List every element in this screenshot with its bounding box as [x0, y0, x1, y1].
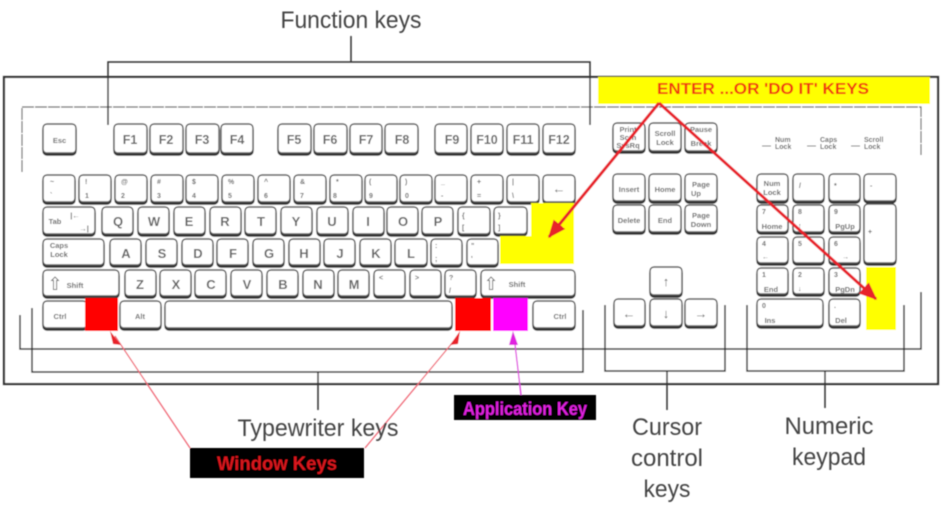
bottom row: Ctrl	[54, 312, 66, 321]
navigation keys: Pause	[690, 125, 712, 134]
cursor arrow keys	[614, 267, 717, 326]
lock indicator lights: Num	[775, 137, 791, 144]
function key row: F3	[195, 133, 209, 147]
number row: *	[336, 179, 339, 186]
number row: (	[369, 179, 372, 186]
ZXCV row: Shift	[509, 280, 526, 289]
lock indicator lights: Lock	[864, 144, 880, 151]
navigation keys: Delete	[618, 216, 640, 225]
numeric keypad keys: End	[764, 285, 778, 294]
QWERTY row: Tab	[49, 217, 62, 226]
QWERTY row: [	[462, 225, 465, 232]
QWERTY row: R	[220, 214, 230, 229]
ASDF row	[43, 239, 498, 265]
QWERTY row: I	[366, 214, 370, 229]
banner: enter or do it keys: ENTER ...OR 'DO IT' KEYS	[657, 81, 869, 98]
ASDF row: L	[407, 246, 415, 261]
QWERTY row: P	[434, 214, 443, 229]
lock indicator lights	[762, 137, 884, 151]
ASDF row: ;	[435, 256, 437, 263]
function key row: F4	[230, 133, 244, 147]
number row: -	[441, 193, 444, 200]
function key row: F2	[159, 133, 173, 147]
ZXCV row: B	[278, 277, 288, 292]
numeric keypad keys: .	[834, 303, 836, 310]
number row: =	[477, 193, 481, 200]
function key row: Esc	[53, 136, 66, 145]
number row: +	[477, 179, 481, 186]
navigation keys: Break	[691, 139, 712, 148]
arrows: banner to enter keys	[549, 103, 876, 299]
numeric keypad keys: 8	[798, 209, 802, 216]
bracket: function keys	[108, 36, 590, 125]
cursor arrow keys: ↑	[663, 274, 669, 289]
ZXCV row: /	[449, 288, 451, 295]
navigation keys: Lock	[656, 138, 675, 147]
QWERTY row: Q	[113, 214, 123, 229]
function key row: F5	[287, 133, 301, 147]
label: application key: Application Key	[463, 399, 587, 419]
numeric keypad keys: PgUp	[835, 222, 855, 231]
highlight: keypad enter key	[866, 267, 896, 330]
ASDF row: K	[371, 246, 381, 261]
function key row: F7	[359, 133, 373, 147]
QWERTY row: U	[327, 214, 337, 229]
numeric keypad keys: 3	[834, 272, 838, 279]
label: typewriter keys: Typewriter keys	[238, 415, 398, 442]
ASDF row: :	[435, 243, 437, 250]
number row: #	[157, 179, 161, 186]
highlight: application key	[493, 298, 528, 331]
label: cursor control keys: keys	[644, 476, 690, 503]
ASDF row: A	[121, 246, 131, 261]
ASDF row: F	[229, 246, 237, 261]
number row: 9	[369, 193, 373, 200]
numeric keypad keys: 1	[762, 272, 766, 279]
numeric keypad keys: *	[834, 183, 837, 190]
bracket: typewriter keys	[20, 292, 921, 410]
QWERTY row: O	[398, 214, 408, 229]
number row: |	[512, 179, 514, 186]
label: cursor control keys: control	[631, 445, 703, 472]
number row: 4	[192, 193, 196, 200]
numeric keypad keys: ↑	[798, 223, 802, 230]
number row	[43, 175, 575, 202]
navigation keys: Home	[655, 185, 675, 194]
numeric keypad keys: Lock	[763, 188, 782, 197]
numeric keypad keys: →	[842, 254, 849, 261]
highlight: left window key	[85, 298, 118, 331]
number row: &	[300, 179, 305, 186]
QWERTY row: ]	[498, 225, 500, 232]
ASDF row: Caps	[50, 241, 68, 250]
function key row: F8	[395, 133, 409, 147]
navigation keys: End	[658, 216, 672, 225]
bottom row	[43, 301, 575, 328]
function key row	[43, 124, 575, 153]
numeric keypad keys: 4	[762, 241, 766, 248]
number row: 0	[405, 193, 409, 200]
ASDF row: J	[336, 246, 344, 261]
label: function keys: Function keys	[280, 7, 422, 34]
ZXCV row: >	[415, 275, 419, 282]
number row: %	[228, 179, 235, 186]
arrows: window key callouts	[110, 331, 460, 448]
number row: 8	[333, 193, 337, 200]
numeric keypad keys	[757, 174, 896, 326]
number row: 7	[300, 193, 304, 200]
label: numeric keypad: Numeric	[784, 413, 874, 440]
number row: _	[440, 179, 445, 186]
QWERTY row	[43, 207, 527, 234]
highlight: right window key	[455, 298, 491, 331]
label: window keys: Window Keys	[217, 454, 337, 475]
ZXCV row: V	[243, 277, 252, 292]
navigation keys	[613, 123, 717, 232]
navigation keys: Page	[692, 180, 710, 189]
ZXCV row: Z	[136, 277, 144, 292]
number row: 6	[264, 193, 268, 200]
numeric keypad keys: Del	[835, 316, 847, 325]
label: window keys	[190, 448, 364, 478]
numeric keypad keys: 5	[798, 241, 802, 248]
navigation keys: Scrn	[620, 133, 637, 142]
ZXCV row: C	[206, 277, 216, 292]
numeric keypad keys: 9	[834, 209, 838, 216]
function key row: F9	[445, 133, 459, 147]
numeric keypad keys: ←	[762, 254, 769, 261]
bracket: numeric keypad	[747, 305, 904, 408]
function key row: F11	[513, 133, 533, 147]
bracket: cursor control keys	[605, 305, 725, 410]
function key row: F10	[476, 133, 498, 147]
cursor arrow keys: →	[694, 306, 708, 321]
numeric keypad keys: -	[870, 183, 873, 190]
QWERTY row: Y	[292, 214, 301, 229]
navigation keys: Print	[619, 125, 637, 134]
lock indicator lights: Scroll	[864, 137, 884, 144]
numeric keypad keys: 2	[798, 272, 802, 279]
ASDF row: H	[299, 246, 309, 261]
QWERTY row: T	[257, 214, 265, 229]
ZXCV row: ⇧	[47, 274, 63, 294]
ZXCV row: ⇧	[483, 274, 499, 294]
numeric keypad keys: 7	[762, 209, 766, 216]
lock indicator lights: Caps	[820, 137, 837, 144]
arrow: application key callout	[509, 331, 521, 395]
navigation keys: Scroll	[655, 129, 675, 138]
number row: !	[85, 179, 87, 186]
number row: ~	[50, 179, 54, 186]
number row: )	[405, 179, 407, 186]
label: numeric keypad	[784, 413, 874, 471]
ASDF row: S	[158, 246, 167, 261]
ASDF row: Lock	[50, 250, 69, 259]
ASDF row: "	[471, 243, 474, 250]
number row: 3	[157, 193, 161, 200]
numeric keypad keys: Ins	[765, 316, 775, 325]
ZXCV row: Shift	[67, 281, 84, 290]
numeric keypad keys: 0	[762, 303, 766, 310]
QWERTY row: E	[185, 214, 194, 229]
label: cursor control keys	[631, 414, 703, 503]
number row: 2	[121, 193, 125, 200]
label: numeric keypad: keypad	[792, 444, 866, 471]
navigation keys: Page	[692, 211, 710, 220]
ASDF row: '	[471, 256, 473, 263]
lock indicator lights: Lock	[820, 144, 836, 151]
bottom row: Ctrl	[554, 312, 566, 321]
number row: ←	[552, 181, 566, 196]
navigation keys: Up	[691, 189, 701, 198]
QWERTY row: }	[498, 213, 501, 220]
number row: $	[192, 179, 196, 186]
navigation keys: Down	[691, 220, 712, 229]
number row: \	[512, 193, 514, 200]
function key row: F6	[323, 133, 337, 147]
number row: `	[50, 193, 52, 200]
cursor arrow keys: ←	[622, 306, 636, 321]
lock indicator lights: Lock	[775, 144, 791, 151]
ZXCV row: M	[349, 277, 359, 292]
QWERTY row: W	[148, 214, 161, 229]
numeric keypad keys: Num	[764, 179, 781, 188]
numeric keypad keys: Home	[762, 222, 782, 231]
ZXCV row: X	[172, 277, 181, 292]
function key row: F1	[123, 133, 137, 147]
cursor arrow keys: ↓	[663, 306, 669, 321]
ZXCV row	[43, 270, 575, 296]
navigation keys: Insert	[619, 185, 640, 194]
ZXCV row: <	[379, 275, 383, 282]
banner: enter or do it keys	[598, 77, 930, 104]
number row: @	[121, 179, 128, 186]
ZXCV row: N	[313, 277, 323, 292]
keyboard outline	[4, 77, 938, 384]
QWERTY row: →|	[79, 224, 89, 233]
label: cursor control keys: Cursor	[632, 414, 702, 441]
number row: ^	[264, 178, 268, 186]
numeric keypad keys: /	[799, 183, 801, 190]
bottom row: Alt	[135, 312, 146, 321]
numeric keypad keys: +	[868, 229, 872, 236]
number row: 5	[228, 193, 232, 200]
function key row: F12	[548, 133, 570, 147]
highlight: main enter key	[500, 203, 574, 264]
ASDF row: G	[264, 246, 274, 261]
numeric keypad keys: ↓	[798, 286, 802, 293]
QWERTY row: |←	[70, 211, 80, 220]
number row: 1	[85, 193, 89, 200]
ASDF row: D	[193, 246, 203, 261]
navigation keys: SysRq	[616, 141, 640, 150]
numeric keypad keys: PgDn	[835, 285, 855, 294]
QWERTY row: {	[462, 213, 465, 220]
ZXCV row: ?	[449, 275, 453, 282]
numeric keypad keys: 6	[834, 241, 838, 248]
